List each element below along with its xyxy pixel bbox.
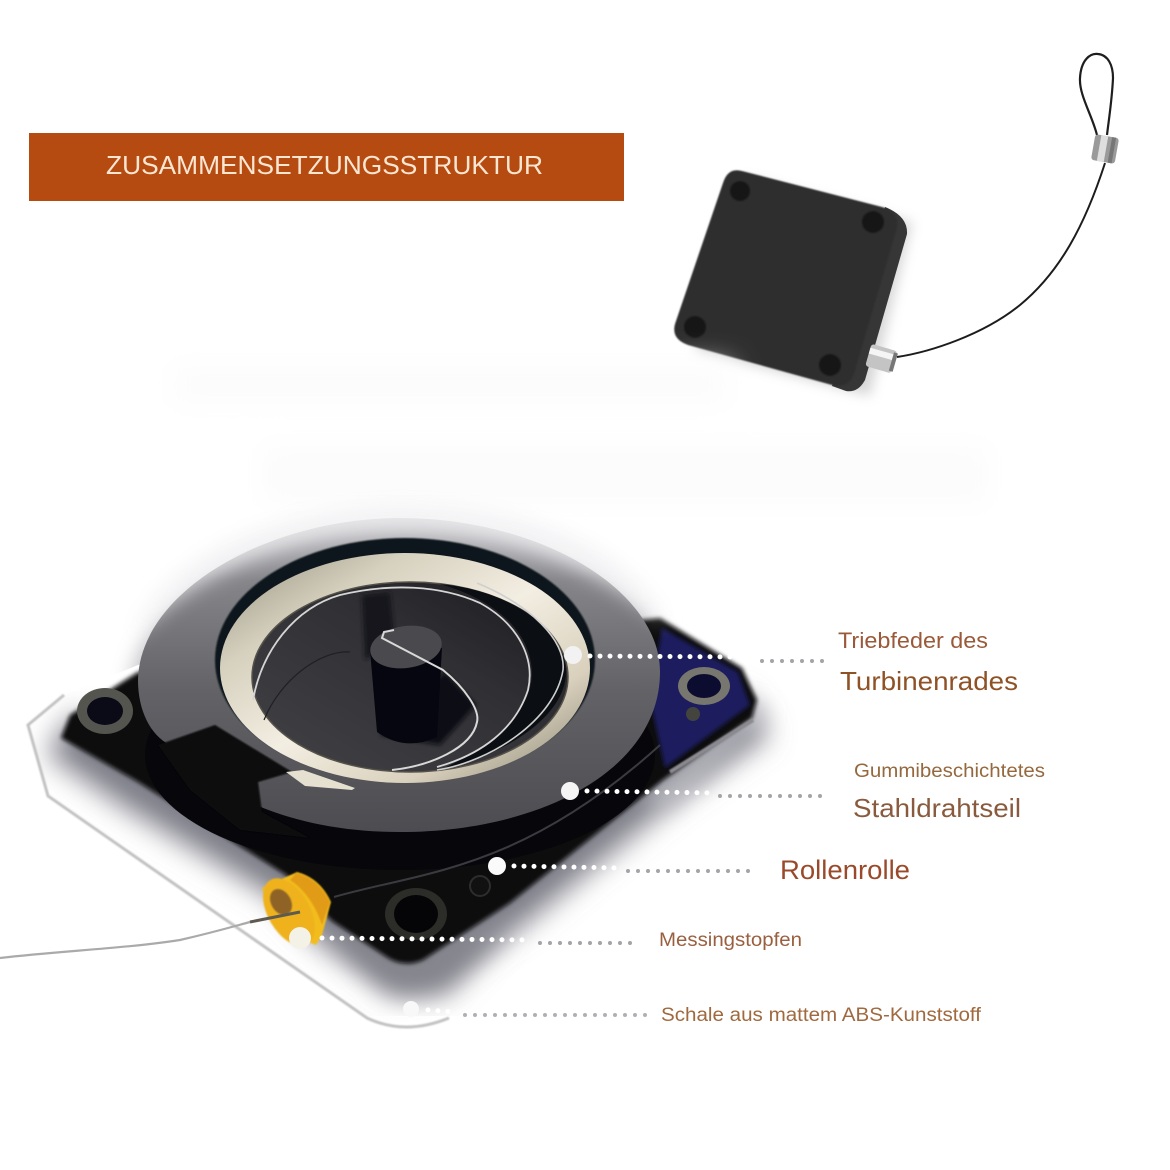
wire leaving roller — [0, 922, 250, 958]
metal ferrule — [865, 344, 898, 374]
callout: Triebfeder des Turbinenrades: Turbinenrades — [840, 666, 1018, 696]
dark outer crescent — [440, 584, 566, 770]
plate edge highlight — [670, 720, 753, 772]
cable loop — [1080, 54, 1113, 135]
product photo: retractable cable box — [674, 54, 1119, 396]
steel ring — [220, 553, 590, 783]
right screw hole — [678, 667, 730, 721]
top glow fade — [130, 505, 668, 640]
callout: Rollenrolle: Rollenrolle — [780, 855, 910, 885]
spring chamber — [252, 582, 568, 772]
callout: Triebfeder des Turbinenrades — [564, 628, 1018, 696]
faint background smudges — [170, 365, 990, 505]
cable crimp — [1091, 134, 1119, 164]
shell grey fade — [61, 714, 755, 964]
steel cable — [897, 163, 1105, 357]
central post — [370, 648, 442, 743]
spring s-hook — [382, 630, 477, 770]
title banner — [29, 133, 624, 201]
brass roller — [252, 869, 331, 955]
callout: Gummibeschichtetes Stahldrahtseil: Gummibeschichtetes — [854, 761, 1045, 782]
callout: Gummibeschichtetes Stahldrahtseil: Stahldrahtseil — [853, 793, 1021, 823]
small pin hole — [470, 876, 490, 896]
translucent shell — [36, 664, 782, 1016]
floor shadow near post — [380, 672, 476, 745]
spring outer coil — [437, 583, 563, 770]
grey turbine housing — [138, 518, 660, 832]
callout: Schale aus mattem ABS-Kunststoff — [403, 1001, 982, 1026]
spring inner coil — [253, 587, 530, 767]
title text: ZUSAMMENSETZUNGSSTRUKTUR — [106, 150, 543, 180]
bottom corner grey fade — [335, 925, 510, 995]
exploded view of the mechanism — [0, 510, 783, 1030]
box shadow — [695, 178, 912, 396]
callout: Rollenrolle — [488, 855, 910, 885]
dark shaft shadow — [362, 592, 395, 660]
box side edge — [832, 207, 907, 391]
dark interior around ring — [215, 538, 595, 782]
lower body drum — [145, 640, 655, 870]
box screw holes — [684, 181, 884, 376]
upper halo glow — [130, 530, 700, 760]
callout: Messingstopfen: Messingstopfen — [659, 930, 802, 951]
left screw hole — [77, 688, 133, 734]
black base plate — [61, 618, 757, 964]
internal cable — [334, 745, 660, 897]
callout: Triebfeder des Turbinenrades: Triebfeder des — [838, 628, 988, 653]
ring tab — [286, 770, 355, 790]
bottom screw hole — [385, 888, 447, 940]
callout: Schale aus mattem ABS-Kunststoff: Schale aus mattem ABS-Kunststoff — [661, 1005, 982, 1026]
dark wire in roller — [250, 912, 300, 922]
callout: Messingstopfen — [289, 927, 802, 951]
navy tint on right corner — [650, 628, 750, 768]
callout: Gummibeschichtetes Stahldrahtseil — [561, 761, 1045, 823]
housing cut-out — [158, 725, 310, 838]
box body — [674, 170, 897, 386]
post top — [367, 621, 445, 673]
corner grey fade — [640, 700, 770, 810]
thin inner groove — [264, 652, 350, 720]
shell outline — [28, 695, 449, 1027]
